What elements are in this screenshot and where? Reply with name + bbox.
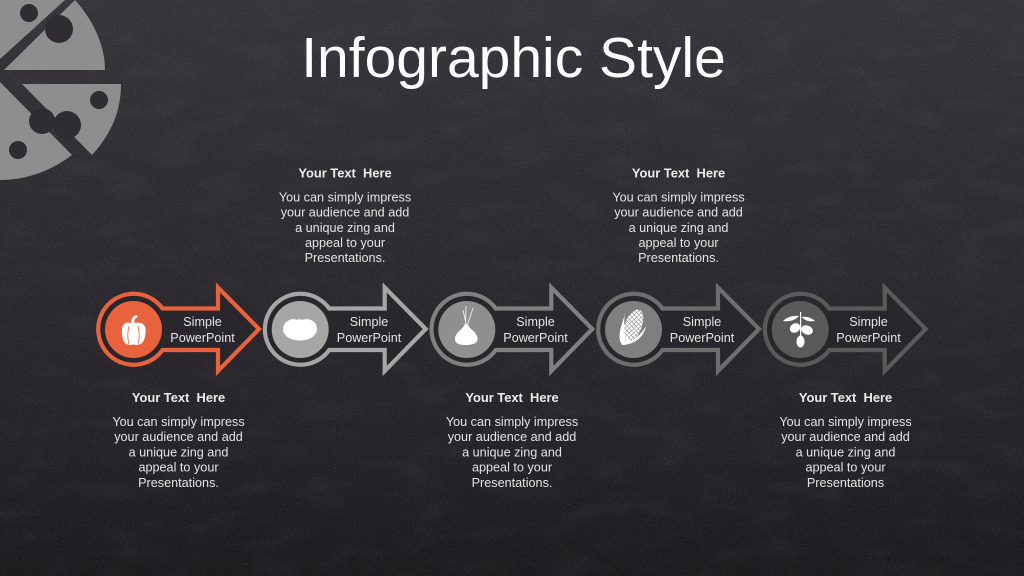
text block: bottom 2: your audience and add [448,430,576,444]
text block: top left: your audience and add [281,206,409,220]
arrow step 4: corn [598,288,759,371]
icon: corn [619,307,647,345]
text block: top left: Your Text Here [298,166,392,180]
text block: bottom 1 [112,390,245,490]
text block: bottom 3 [779,390,912,490]
arrow step 4: corn: Simple [683,315,721,329]
text block: top left: appeal to your [305,236,385,250]
arrow step 4: corn: PowerPoint [670,331,735,345]
text block: top left: a unique zing and [295,221,395,235]
text block: top right: appeal to your [638,236,719,250]
arrow step 2: tomato [265,288,426,371]
text block: bottom 3: Presentations [807,476,884,490]
text block: bottom 2: appeal to your [472,460,552,474]
text block: top left: You can simply impress [279,190,411,204]
arrow step 5: olive branch: Simple [849,315,888,329]
text block: bottom 3: a unique zing and [796,446,895,460]
text block: top right [612,166,745,265]
text block: top right: Your Text Here [632,166,725,180]
text block: top right: Presentations. [638,251,719,265]
arrow step 1: pepper: PowerPoint [170,331,235,345]
text block: top right: You can simply impress [612,190,745,204]
text block: bottom 2: Your Text Here [465,390,559,405]
arrow step 3: onion [431,288,592,371]
text block: bottom 1: your audience and add [114,430,243,444]
icon: bell pepper [122,315,146,345]
arrow step 5: olive branch: PowerPoint [836,331,901,345]
text block: bottom 3: your audience and add [781,430,910,444]
arrow step 2: tomato: PowerPoint [337,331,402,345]
arrow step 1: pepper [98,288,259,371]
text block: top right: your audience and add [614,206,743,220]
text block: bottom 2 [446,390,578,490]
icon: olive branch [783,312,815,348]
arrow step 3: onion: PowerPoint [503,331,568,345]
text block: bottom 1: a unique zing and [129,446,228,460]
arrow step 2: tomato: Simple [350,315,388,329]
text block: top left: Presentations. [305,251,385,265]
text block: bottom 2: a unique zing and [462,446,562,460]
arrow step 5: olive branch [765,288,926,371]
text block: bottom 2: Presentations. [472,476,552,490]
text block: bottom 3: appeal to your [805,460,886,474]
text block: bottom 1: Presentations. [138,476,219,490]
icon: pizza slices corner decoration [0,0,121,180]
text block: bottom 1: appeal to your [138,460,219,474]
text block: bottom 1: You can simply impress [112,415,245,429]
text block: bottom 3: You can simply impress [779,415,912,429]
title: Infographic Style [301,26,726,90]
text block: bottom 1: Your Text Here [132,390,225,405]
icon: onion [455,306,478,345]
text block: bottom 2: You can simply impress [446,415,578,429]
icon: tomato [283,319,317,340]
arrow step 1: pepper: Simple [183,315,222,329]
text block: bottom 3: Your Text Here [799,390,892,405]
text block: top left [279,166,411,265]
text block: top right: a unique zing and [629,221,728,235]
arrow step 3: onion: Simple [516,315,555,329]
